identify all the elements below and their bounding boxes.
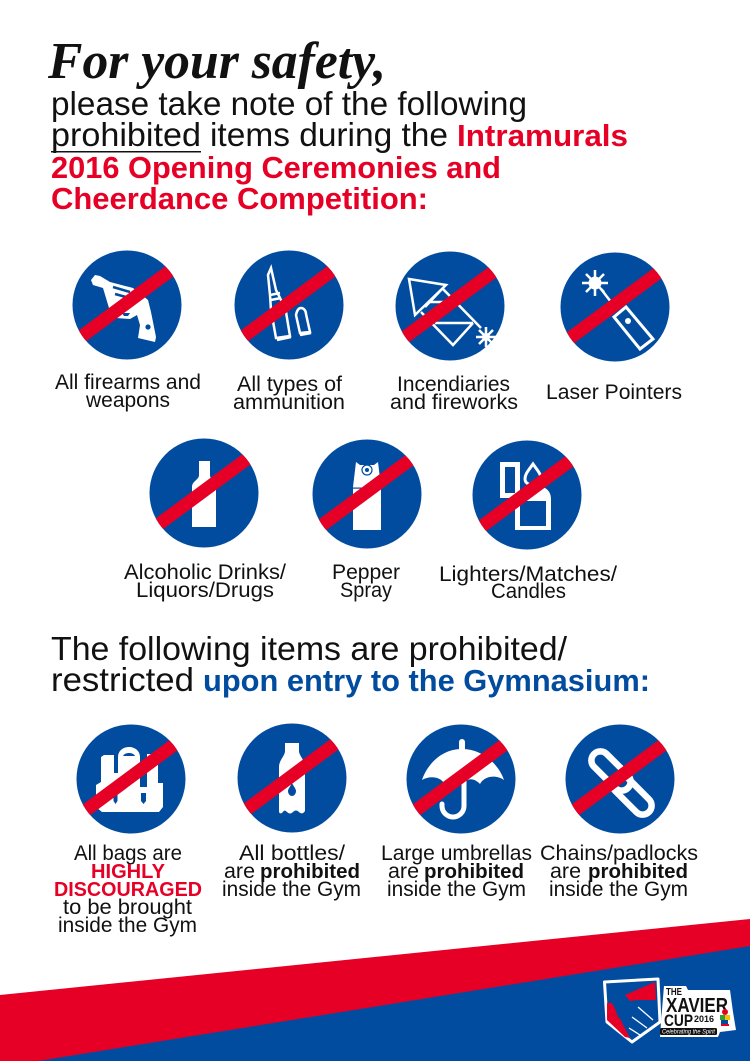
icon: chains and padlocks prohibited xyxy=(566,724,674,834)
caption: fireworks: Incendiaries xyxy=(397,373,510,396)
caption: pepper spray: Pepper xyxy=(332,561,400,584)
footer band: blue xyxy=(38,946,750,1061)
caption: firearms xyxy=(55,371,201,412)
caption: pepper spray xyxy=(332,561,400,602)
icon: laser pointers prohibited xyxy=(560,252,670,362)
logo wordmark xyxy=(660,986,736,1037)
icon: ammunition prohibited xyxy=(234,250,344,360)
logo wordmark: THE xyxy=(666,987,682,998)
caption: ammunition xyxy=(233,373,345,414)
logo wordmark: Celebrating the Spirit xyxy=(662,1030,715,1036)
logo shield xyxy=(604,979,660,1042)
caption: bags: DISCOURAGED xyxy=(54,879,202,901)
footer band: red xyxy=(0,919,750,1061)
caption: fireworks: and fireworks xyxy=(390,391,518,414)
logo wordmark: 2016 xyxy=(694,1014,714,1024)
caption: chains xyxy=(540,842,698,901)
caption: bags: All bags are xyxy=(74,842,182,865)
icon: pepper spray prohibited xyxy=(312,440,422,548)
heading: prohibited items intro: Cheerdance Competition: xyxy=(51,181,428,216)
caption: umbrellas: prohibited xyxy=(424,861,524,883)
heading: gymnasium restrictions xyxy=(51,630,650,698)
caption: lighters: Lighters/Matches/ xyxy=(439,563,617,586)
caption: ammunition: ammunition xyxy=(233,391,345,414)
heading: gymnasium restrictions: restricted xyxy=(51,661,194,698)
heading: prohibited items intro: prohibited xyxy=(51,116,201,153)
icon: incendiaries and fireworks prohibited xyxy=(396,252,504,360)
caption: bottles xyxy=(222,842,361,901)
icon: alcoholic drinks prohibited xyxy=(150,438,258,548)
caption: alcoholic drinks: Liquors/Drugs xyxy=(136,579,274,602)
caption: laser pointers: Laser Pointers xyxy=(546,381,682,404)
caption: bags: HIGHLY xyxy=(91,861,166,883)
caption: alcoholic drinks: Alcoholic Drinks/ xyxy=(124,561,286,584)
heading: prohibited items intro: items during the xyxy=(210,116,448,153)
heading: prohibited items intro xyxy=(51,85,628,216)
caption: firearms: All firearms and xyxy=(55,371,201,394)
icon: firearms prohibited xyxy=(72,250,182,360)
caption: chains: Chains/padlocks xyxy=(540,842,698,865)
caption: bottles: All bottles/ xyxy=(239,842,345,865)
caption: chains: inside the Gym xyxy=(549,878,688,901)
logo: The Xavier Cup 2016 xyxy=(604,979,736,1042)
caption: bottles: inside the Gym xyxy=(222,878,361,901)
caption: lighters xyxy=(439,563,617,603)
caption: umbrellas xyxy=(381,842,532,901)
heading: prohibited items intro: 2016 Opening Ceremonies and xyxy=(51,150,501,185)
caption: alcoholic drinks xyxy=(124,561,286,602)
caption: bottles: are xyxy=(224,860,255,883)
caption: fireworks xyxy=(390,373,518,414)
caption: umbrellas: Large umbrellas xyxy=(381,842,532,865)
caption: bottles: prohibited xyxy=(260,861,360,883)
title: For your safety, xyxy=(47,33,386,90)
logo wordmark: CUP xyxy=(664,1011,693,1030)
caption: chains: are xyxy=(550,860,581,883)
caption: bags: inside the Gym xyxy=(58,914,197,937)
caption: lighters: Candles xyxy=(491,580,566,603)
caption: firearms: weapons xyxy=(85,389,170,412)
caption: bags: to be brought xyxy=(63,896,192,919)
heading: gymnasium restrictions: upon entry to the Gymnasium: xyxy=(203,663,650,698)
icon: bags prohibited xyxy=(76,724,186,834)
heading: prohibited items intro: please take note of the following xyxy=(51,85,527,122)
icon: large umbrellas prohibited xyxy=(406,724,516,834)
icon: bottles prohibited xyxy=(238,724,346,832)
caption: chains: prohibited xyxy=(588,861,688,883)
caption: bags xyxy=(54,842,202,937)
heading: prohibited items intro: Intramurals xyxy=(457,118,628,153)
heading: gymnasium restrictions: The following items are prohibited/ xyxy=(51,630,568,667)
caption: pepper spray: Spray xyxy=(340,579,392,602)
logo wordmark: XAVIER xyxy=(666,995,728,1017)
caption: ammunition: All types of xyxy=(237,373,342,396)
caption: umbrellas: inside the Gym xyxy=(387,878,526,901)
caption: umbrellas: are xyxy=(388,860,419,883)
logo mascot xyxy=(720,1009,730,1026)
icon: lighters, matches and candles prohibited xyxy=(472,440,582,550)
